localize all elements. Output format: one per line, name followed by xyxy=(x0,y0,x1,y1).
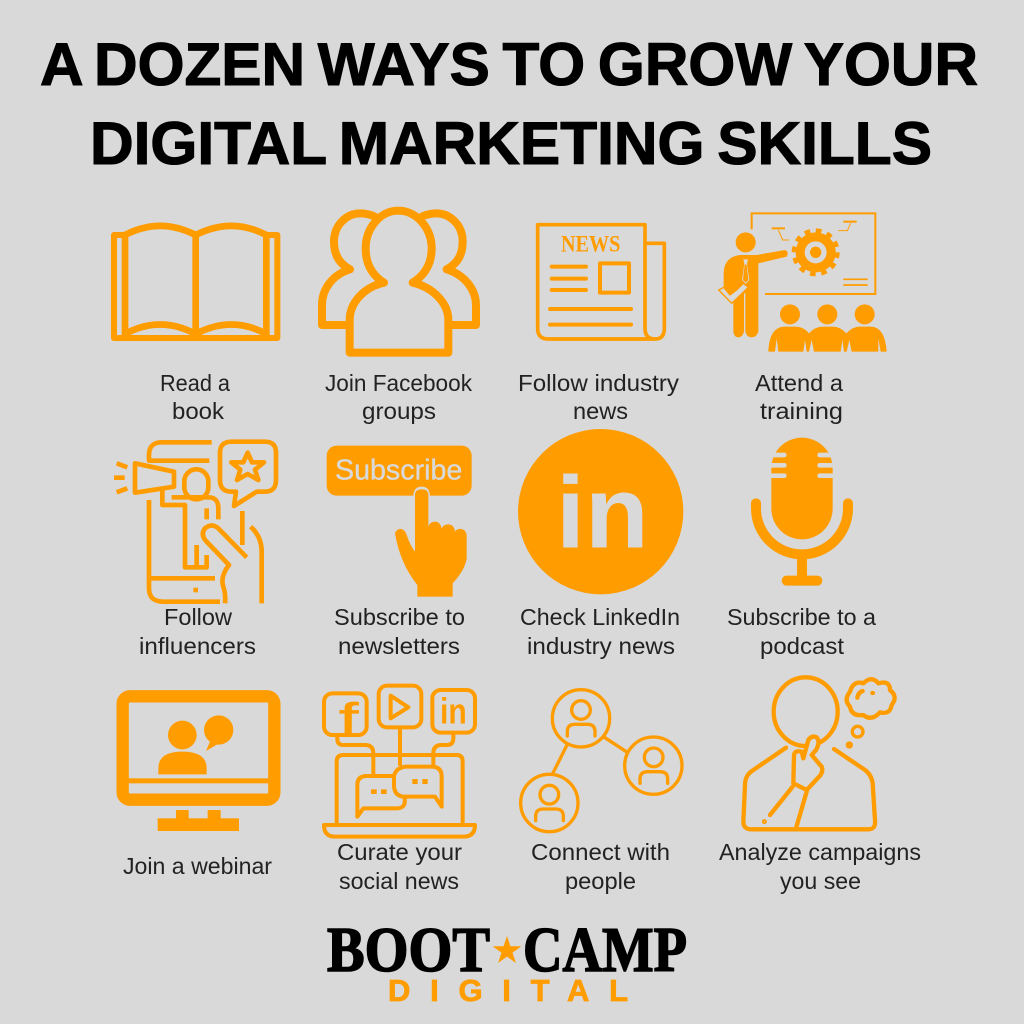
icon: laptop with social media: in xyxy=(440,691,467,732)
label: read a book xyxy=(160,370,230,424)
icon: linkedin circle xyxy=(518,429,683,594)
label: follow influencers: Follow xyxy=(164,604,232,630)
label: analyze campaigns you see xyxy=(719,839,921,894)
icon: group of people xyxy=(322,211,476,353)
icon: microphone xyxy=(756,438,848,586)
label: curate your social news: social news xyxy=(339,868,459,894)
label: subscribe to newsletters xyxy=(334,604,465,659)
label: read a book: book xyxy=(172,398,225,424)
icon: newspaper: NEWS xyxy=(561,232,620,258)
panel: analyze campaigns you see xyxy=(719,677,921,894)
label: join facebook groups xyxy=(325,370,472,424)
label: join facebook groups: Join Facebook xyxy=(325,370,472,396)
panel: read a book xyxy=(114,226,277,424)
panel: subscribe to a podcast xyxy=(727,438,876,659)
label: connect with people: Connect with xyxy=(531,839,670,865)
logo: boot camp digital: CAMP xyxy=(523,914,687,985)
label: subscribe to a podcast: podcast xyxy=(760,633,845,659)
icon: trainer with audience xyxy=(719,213,887,352)
icon: logo star xyxy=(493,936,521,963)
label: follow industry news: Follow industry xyxy=(518,370,680,396)
label: subscribe to a podcast xyxy=(727,604,876,659)
label: curate your social news: Curate your xyxy=(337,839,462,865)
panel: curate your social news xyxy=(324,686,475,894)
label: check linkedin industry news xyxy=(520,604,680,659)
label: analyze campaigns you see: you see xyxy=(780,868,861,894)
title: DIGITAL MARKETING SKILLS xyxy=(90,110,932,177)
icon: laptop with social media xyxy=(324,686,475,837)
label: follow industry news xyxy=(518,370,680,424)
panel: follow industry news xyxy=(518,225,680,424)
icon: connected people network xyxy=(521,690,682,832)
logo: boot camp digital xyxy=(327,914,687,1008)
label: subscribe to newsletters: newsletters xyxy=(338,633,460,659)
label: attend a training: training xyxy=(760,398,843,424)
label: attend a training xyxy=(755,370,843,424)
panel: connect with people xyxy=(521,690,682,894)
icon: subscribe button with hand: Subscribe xyxy=(335,454,462,486)
panel: attend a training xyxy=(719,213,887,424)
icon: linkedin circle: in xyxy=(556,456,649,570)
label: join a webinar: Join a webinar xyxy=(123,853,272,879)
icon: laptop with social media: f xyxy=(339,695,360,743)
icon: newspaper xyxy=(538,225,664,339)
panel: check linkedin industry news xyxy=(518,429,683,659)
icon: subscribe button with hand xyxy=(327,446,472,597)
label: curate your social news xyxy=(337,839,462,894)
label: follow industry news: news xyxy=(573,398,628,424)
label: check linkedin industry news: industry news xyxy=(527,633,675,659)
label: attend a training: Attend a xyxy=(755,370,843,396)
icon: monitor with speaker xyxy=(123,696,274,831)
label: analyze campaigns you see: Analyze campaigns xyxy=(719,839,921,865)
label: read a book: Read a xyxy=(160,370,230,396)
label: follow influencers xyxy=(139,604,256,659)
label: connect with people: people xyxy=(565,868,636,894)
panel: join a webinar xyxy=(123,696,274,879)
label: subscribe to newsletters: Subscribe to xyxy=(334,604,465,630)
icon: open book xyxy=(114,226,277,338)
label: check linkedin industry news: Check LinkedIn xyxy=(520,604,680,630)
panel: join facebook groups xyxy=(322,211,476,424)
icon: influencer on phone xyxy=(114,442,276,603)
label: subscribe to a podcast: Subscribe to a xyxy=(727,604,876,630)
logo: boot camp digital: BOOT xyxy=(327,914,490,985)
title: A DOZEN WAYS TO GROW YOUR xyxy=(40,31,978,98)
label: follow influencers: influencers xyxy=(139,633,256,659)
panel: subscribe to newsletters xyxy=(327,446,472,659)
icon: thinking person xyxy=(743,677,895,829)
title xyxy=(40,31,978,177)
panel: follow influencers xyxy=(114,442,276,659)
label: join facebook groups: groups xyxy=(362,398,436,424)
logo: boot camp digital: DIGITAL xyxy=(388,973,628,1008)
label: connect with people xyxy=(531,839,670,894)
